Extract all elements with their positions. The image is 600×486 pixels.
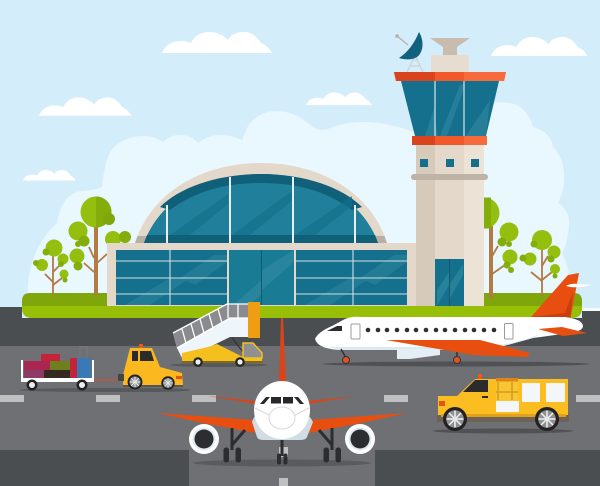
collar [411, 174, 488, 180]
wings [157, 413, 255, 433]
lower band [412, 136, 487, 145]
terminal building [107, 163, 417, 306]
sky background [0, 0, 600, 320]
runway markings [0, 395, 600, 486]
landing gear [341, 349, 460, 364]
right engine [345, 424, 375, 454]
tail [279, 318, 286, 381]
left engine [189, 424, 219, 454]
terminal door [229, 250, 294, 305]
tower shaft [416, 145, 435, 306]
satellite dish [395, 32, 423, 72]
luggage [24, 347, 91, 378]
dome [135, 163, 387, 243]
control tower [394, 32, 506, 306]
window row [366, 328, 496, 332]
large background cloud [28, 102, 573, 296]
tailplanes [208, 396, 356, 404]
tail fin [531, 273, 579, 321]
terminal windows [116, 250, 407, 305]
grass strip [22, 306, 582, 318]
side-view airplane [315, 273, 592, 366]
clouds in the sky [23, 32, 587, 180]
tower door [435, 259, 464, 306]
terminal wall [107, 243, 417, 306]
stairs truck body [182, 344, 262, 362]
small windows [420, 159, 479, 167]
trees left [33, 196, 131, 295]
stairs [173, 304, 248, 360]
baggage cart [19, 347, 191, 392]
front-view airplane [157, 318, 407, 466]
tail stabilizer [538, 327, 587, 336]
wing [386, 340, 530, 357]
passenger stairs truck [170, 302, 268, 367]
main landing gear [224, 428, 340, 464]
ground apron [0, 307, 600, 486]
cab glass [401, 81, 499, 136]
back lawn [22, 293, 582, 307]
cockpit windows [260, 397, 304, 404]
yellow utility truck [433, 374, 573, 434]
doors [351, 324, 513, 339]
fuselage [315, 317, 583, 350]
fuselage [252, 415, 313, 440]
roof band [394, 72, 506, 81]
cart frame [22, 360, 93, 380]
tower top cap [430, 38, 470, 72]
yellow baggage tug [110, 344, 190, 392]
cockpit window [327, 326, 342, 331]
trees right [468, 198, 560, 298]
